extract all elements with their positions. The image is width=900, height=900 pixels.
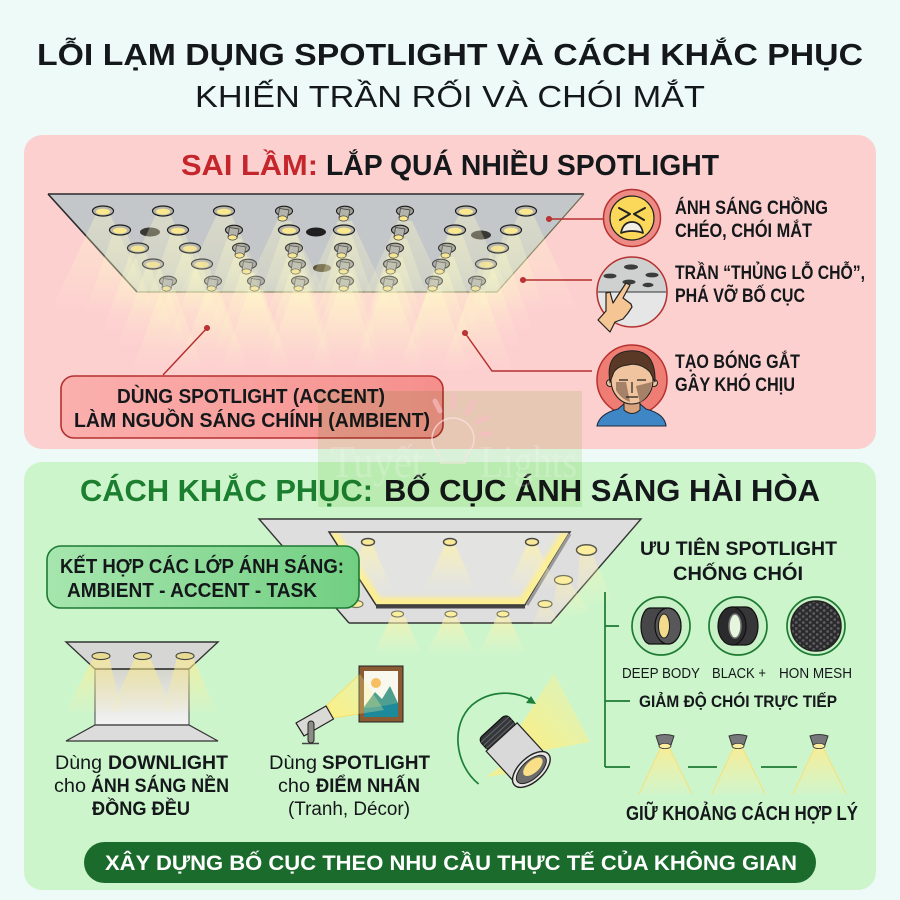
heading: solution (80, 472, 820, 508)
callout: combine light layers: KẾT HỢP CÁC LỚP ÁNH SÁNG: (60, 554, 344, 578)
title: LỖI LẠM DỤNG SPOTLIGHT VÀ CÁCH KHẮC PHỤC (37, 36, 863, 72)
text: downlight: DOWNLIGHT (108, 753, 228, 774)
heading: anti-glare spotlight: CHỐNG CHÓI (673, 561, 803, 585)
icon: honeycomb mesh (787, 597, 845, 655)
ceiling crowded with spotlights (48, 194, 584, 372)
icon: deep body (632, 597, 690, 655)
cove lamps and beams (344, 538, 558, 590)
text: downlight: ĐỒNG ĐỀU (92, 798, 190, 820)
watermark: Tuyết (330, 436, 423, 487)
dark holes (140, 228, 491, 272)
labels: anti-glare types: DEEP BODY (622, 665, 700, 682)
callout: spotlight as ambient (61, 376, 443, 438)
callout: combine light layers: AMBIENT - ACCENT - TASK (67, 580, 318, 602)
text: harsh shadow (675, 351, 800, 396)
text: downlight (54, 753, 229, 820)
text: harsh shadow: TẠO BÓNG GẮT (675, 351, 800, 373)
illustration: adjustable spotlight (458, 673, 590, 794)
watermark (318, 391, 582, 507)
lamps (92, 206, 536, 291)
light beams (51, 214, 578, 372)
icon: squinting face (604, 190, 660, 246)
text: downlight: cho (54, 776, 86, 797)
text: holes: TRẦN “THỦNG LỖ CHỖ”, (675, 262, 865, 284)
text: spotlight: Dùng (269, 753, 317, 774)
heading: mistake: LẮP QUÁ NHIỀU SPOTLIGHT (326, 148, 719, 182)
spotlight body (475, 711, 556, 794)
heading: mistake: SAI LẦM: (181, 148, 318, 182)
labels: anti-glare types (622, 665, 852, 682)
text: spotlight: (Tranh, Décor) (288, 799, 410, 820)
spaced lamps (639, 734, 846, 794)
text: downlight: ÁNH SÁNG NỀN (91, 775, 229, 797)
bottom banner (84, 842, 816, 883)
heading: solution: BỐ CỤC ÁNH SÁNG HÀI HÒA (384, 472, 820, 508)
icon: black plus (709, 597, 767, 655)
perimeter lamps and beams (349, 545, 612, 655)
title (37, 36, 863, 114)
text: holes: PHÁ VỠ BỐ CỤC (675, 285, 805, 307)
callout: combine light layers (47, 546, 359, 608)
heading: solution: CÁCH KHẮC PHỤC: (80, 472, 373, 508)
panel: mistake (24, 135, 876, 449)
rotation arrow (458, 693, 536, 784)
labels: anti-glare types: BLACK + (712, 665, 766, 682)
text: reduce direct glare: GIẢM ĐỘ CHÓI TRỰC TIẾP (639, 692, 837, 711)
text: glare: CHÉO, CHÓI MẮT (675, 220, 812, 242)
leader lines (163, 217, 604, 375)
illustration: downlight room (66, 642, 218, 741)
icon: holes in ceiling with pointing hand (597, 257, 667, 332)
anti-glare bracket lines (605, 592, 797, 767)
text: spotlight: SPOTLIGHT (322, 753, 430, 774)
text: spotlight: cho (278, 776, 310, 797)
text: glare (675, 197, 828, 242)
illustration: spotlight on picture (296, 666, 403, 744)
title: KHIẾN TRẦN RỐI VÀ CHÓI MẮT (195, 78, 705, 114)
callout: spotlight as ambient: DÙNG SPOTLIGHT (ACCENT) (117, 384, 385, 408)
layered ceiling (259, 519, 641, 655)
panel: solution (24, 462, 876, 890)
callout: spotlight as ambient: LÀM NGUỒN SÁNG CHÍNH (AMBIENT) (74, 408, 430, 432)
text: keep spacing: GIỮ KHOẢNG CÁCH HỢP LÝ (626, 801, 859, 825)
labels: anti-glare types: HON MESH (779, 665, 852, 682)
text: downlight: Dùng (55, 753, 102, 774)
icon: person with harsh shadows (597, 345, 667, 426)
text: spotlight: ĐIỂM NHẤN (316, 775, 420, 797)
text: harsh shadow: GÂY KHÓ CHỊU (675, 374, 795, 396)
watermark: Lights (480, 436, 577, 487)
text: spotlight (269, 753, 430, 820)
heading: anti-glare spotlight (640, 536, 837, 585)
heading: anti-glare spotlight: ƯU TIÊN SPOTLIGHT (640, 536, 837, 560)
heading: mistake (181, 148, 719, 182)
text: holes (675, 262, 865, 307)
bottom banner: XÂY DỰNG BỐ CỤC THEO NHU CẦU THỰC TẾ CỦA KHÔNG GIAN (105, 851, 797, 875)
text: glare: ÁNH SÁNG CHỒNG (675, 197, 828, 219)
